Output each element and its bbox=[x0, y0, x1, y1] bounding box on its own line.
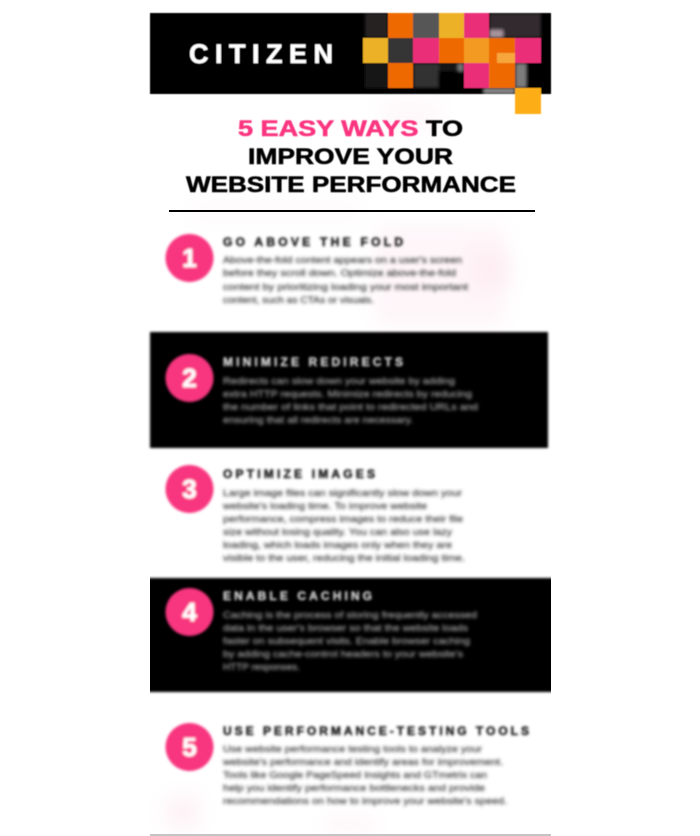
section 1: go above the fold bbox=[166, 234, 468, 306]
black band 2 bbox=[150, 332, 548, 448]
body text 3: performance, compress images to reduce their file bbox=[223, 514, 463, 525]
body text 5: recommendations on how to improve your website's speed. bbox=[223, 796, 507, 807]
bottom edge line bbox=[150, 834, 551, 836]
body text 4: Caching is the process of storing frequently accessed bbox=[223, 610, 477, 621]
number badge 1 bbox=[166, 234, 214, 282]
body text 5: Tools like Google PageSpeed Insights and GTmetrix can bbox=[223, 770, 487, 781]
body text 3: size without losing quality. You can also use lazy bbox=[223, 527, 452, 538]
number badge 5 bbox=[166, 723, 214, 771]
body text 2: the number of links that point to redirected URLs and bbox=[223, 402, 478, 413]
heading 4: ENABLE CACHING bbox=[223, 589, 372, 603]
body text 1: Above-the-fold content appears on a user's screen bbox=[223, 255, 462, 266]
section 2: minimize redirects bbox=[150, 332, 548, 448]
number badge 2: 2 bbox=[182, 363, 197, 393]
body text 5: website's performance and identify areas for improvement. bbox=[222, 757, 503, 768]
body text 4: by adding cache-control headers to your website's bbox=[223, 649, 463, 660]
title line 1: 5 EASY WAYS TO bbox=[238, 116, 463, 141]
body text 4: faster on subsequent visits. Enable browser caching bbox=[223, 636, 470, 647]
body text 1: content by prioritizing loading your most important bbox=[223, 282, 468, 293]
body text 3: loading, which loads images only when they are bbox=[223, 540, 452, 551]
body text 4: HTTP responses. bbox=[223, 662, 300, 673]
pixel texture bbox=[365, 13, 541, 94]
title divider bbox=[169, 210, 535, 212]
number badge 4 bbox=[166, 588, 214, 636]
body text 3: Large image files can significantly slow down your bbox=[223, 488, 463, 499]
body text 2: extra HTTP requests. Minimize redirects by reducing bbox=[223, 389, 472, 400]
body text 5: Use website performance testing tools to analyze your bbox=[223, 744, 483, 755]
heading 2: MINIMIZE REDIRECTS bbox=[223, 355, 403, 369]
title line 3: WEBSITE PERFORMANCE bbox=[186, 172, 516, 197]
number badge 1: 1 bbox=[182, 243, 197, 273]
banner background bbox=[150, 13, 551, 94]
faint pink background texture bbox=[165, 100, 510, 832]
body text 2: Redirects can slow down your website by adding bbox=[223, 376, 455, 387]
section 4: enable caching bbox=[140, 578, 560, 692]
body text 3: website's loading time. To improve website bbox=[222, 501, 427, 512]
number badge 3 bbox=[166, 465, 214, 513]
heading 1: GO ABOVE THE FOLD bbox=[223, 235, 403, 249]
section 5: use performance-testing tools bbox=[166, 723, 529, 807]
title bbox=[186, 116, 516, 197]
body text 3: visible to the user, reducing the initial loading time. bbox=[223, 553, 465, 564]
number badge 5: 5 bbox=[182, 732, 197, 762]
body text 1 bbox=[223, 255, 468, 306]
body text 2 bbox=[223, 376, 478, 426]
body text 1: before they scroll down. Optimize above-the-fold bbox=[223, 268, 456, 279]
section 3: optimize images bbox=[166, 465, 465, 564]
logo wordmark: CITIZEN bbox=[189, 39, 333, 69]
header banner bbox=[150, 13, 551, 114]
body text 4 bbox=[223, 610, 477, 673]
black band 4 bbox=[140, 578, 560, 692]
body text 5 bbox=[222, 744, 507, 807]
body text 2: ensuring that all redirects are necessary. bbox=[223, 415, 413, 426]
title line 2: IMPROVE YOUR bbox=[248, 144, 453, 169]
number badge 4: 4 bbox=[182, 597, 197, 627]
heading 5: USE PERFORMANCE-TESTING TOOLS bbox=[223, 724, 529, 738]
body text 4: data in the user's browser so that the website loads bbox=[223, 623, 468, 634]
number badge 2 bbox=[166, 354, 214, 402]
colored squares bbox=[363, 13, 541, 88]
body text 1: content, such as CTAs or visuals. bbox=[223, 295, 374, 306]
body text 3 bbox=[222, 488, 465, 564]
body text 5: help you identify performance bottlenecks and provide bbox=[223, 783, 485, 794]
number badge 3: 3 bbox=[182, 474, 197, 504]
yellow accent square bbox=[515, 88, 541, 114]
heading 3: OPTIMIZE IMAGES bbox=[223, 467, 375, 481]
